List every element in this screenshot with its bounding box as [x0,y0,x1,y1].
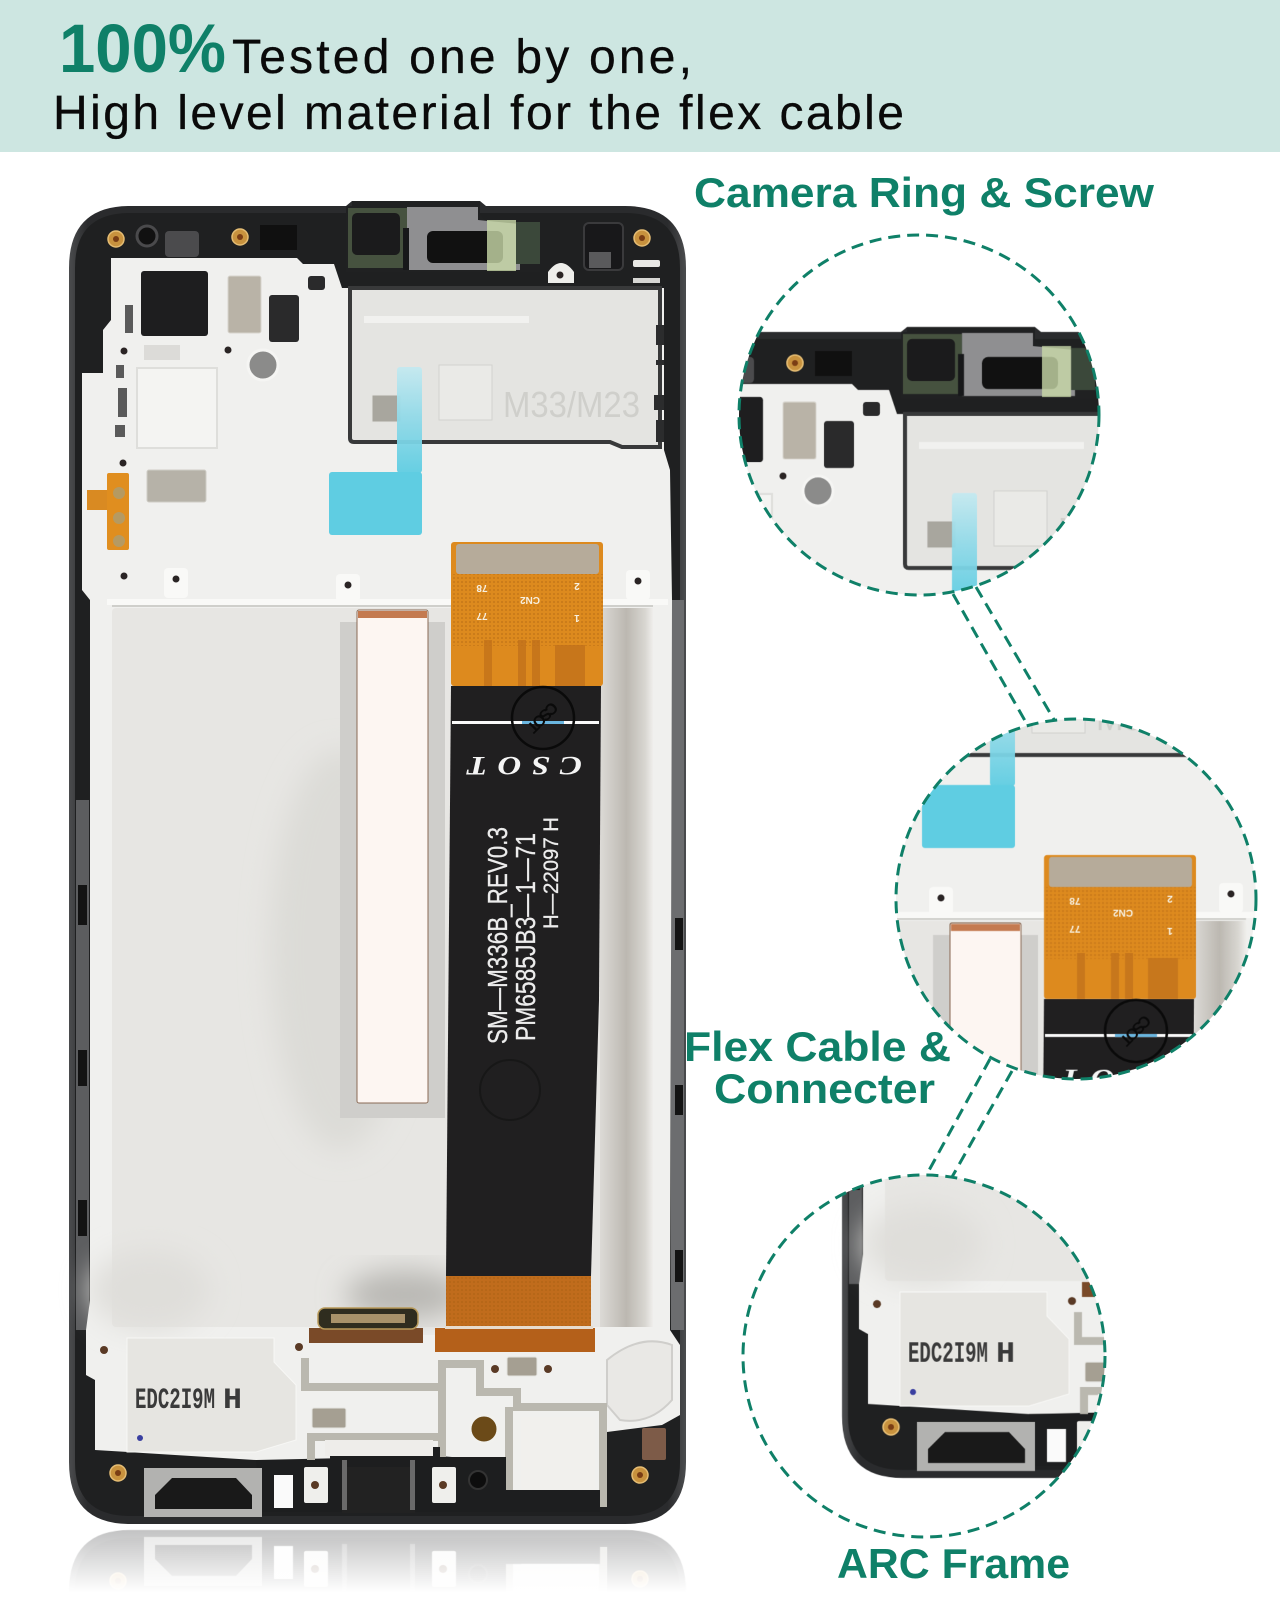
header band [0,0,1280,152]
left slots [115,305,133,437]
stamp text: CSOT [523,698,561,736]
headline: 100% [59,10,226,87]
pin labels: 78 [476,582,488,593]
connector tail [435,1328,595,1352]
mic hole [469,1471,487,1489]
board connector [309,1308,423,1343]
mirrored photo [60,1526,700,1600]
phone reflection [60,1526,700,1600]
right notches [654,325,664,442]
pin labels: 2 [574,580,580,591]
earpiece [403,207,540,271]
grey hole [248,350,278,380]
phone frame product photo [69,201,686,1524]
flex orange top [451,542,603,686]
small dots [120,346,642,588]
white label [274,1475,293,1508]
small square [308,276,325,290]
flex trace pattern [484,640,585,686]
bottom metal pads [312,1357,537,1428]
flex label CSOT: CSOT [457,751,582,780]
usb side tabs [304,1467,456,1503]
top small rect [260,225,297,250]
reflection fade [60,1526,700,1600]
bottom holes [100,1343,552,1373]
top cavity: camera [346,201,540,272]
orange side flex [87,473,129,550]
label: flex cable and connecter: Connecter [714,1065,935,1112]
metal shield strip [305,1358,603,1507]
metal pad [228,276,261,333]
printed batch code: H [223,1384,242,1418]
headline [53,10,904,140]
headline: High level material for the flex cable [53,87,904,140]
white line [452,721,599,724]
side rails [76,600,684,1330]
speaker box outline [350,288,660,447]
main flex cable [435,542,603,1352]
lower faint stamp [480,1060,540,1120]
label: flex cable and connecter: Flex Cable & [684,1023,951,1070]
speaker grille [144,1468,262,1517]
dark pad [269,295,299,342]
raised screw tabs [164,568,650,602]
headline: Tested one by one, [232,31,692,84]
top left sensor [137,226,157,246]
pin labels: 77 [476,610,488,621]
magnified photo 2 [896,719,1256,1079]
magnified photo 3 [743,1175,1105,1537]
connector: circle 1 to circle 2 [953,587,1056,726]
small metal pad in box [372,395,401,422]
top right bits [548,223,660,283]
pin labels [476,580,580,623]
detail circle: flex cable [896,719,1256,1079]
white block right [521,1417,595,1490]
screws [108,229,650,1483]
printed batch code: EDC2I9M [135,1384,215,1418]
outer black bezel [69,201,686,1524]
flex part number 3: H—22097 H [540,817,563,929]
magnified photo 1 [739,235,1099,595]
label: flex cable and connecter [684,1023,951,1112]
label: camera ring and screw: Camera Ring & Screw [694,169,1154,216]
pin labels: 1 [574,612,580,623]
usb opening [325,1440,433,1513]
pin labels: CN2 [520,594,540,605]
flex orange bottom [446,1275,591,1327]
connector: circle 2 to circle 3 [927,1059,1012,1177]
black square adhesive [141,271,208,336]
blue dot [137,1435,143,1441]
detail circle: camera ring [739,235,1099,595]
white tape strip [357,610,428,1103]
brown pad right [642,1428,666,1460]
ledge above panel [107,599,668,605]
dashed ring 3 [743,1175,1105,1537]
right bottom round recess [607,1341,672,1421]
stamp [512,687,574,749]
flex grey tab [456,544,599,574]
bottom frame recess [127,1338,296,1452]
embossed model text: M33/M23 [503,384,640,425]
detail circle: arc frame [743,1175,1105,1537]
cyan tape [329,367,422,535]
top left grey window [165,231,199,257]
mottling [90,750,465,1330]
flex black body [446,686,601,1276]
gold hole [470,1415,498,1443]
raised square [137,368,217,448]
white tape strip shadow [340,622,445,1118]
dashed ring 2 [896,719,1256,1079]
inner panel [112,608,653,1327]
white mid frame [82,258,680,1507]
flex part number 2: PM6585JB3—1—71 [510,833,541,1041]
bottom black cavity [256,1447,600,1512]
dashed ring 1 [739,235,1099,595]
right grey band [600,608,653,1327]
flex part number 1: SM—M336B_REV0.3 [482,827,513,1044]
label: arc frame: ARC Frame [837,1540,1070,1587]
metal pad 2 [147,470,206,502]
